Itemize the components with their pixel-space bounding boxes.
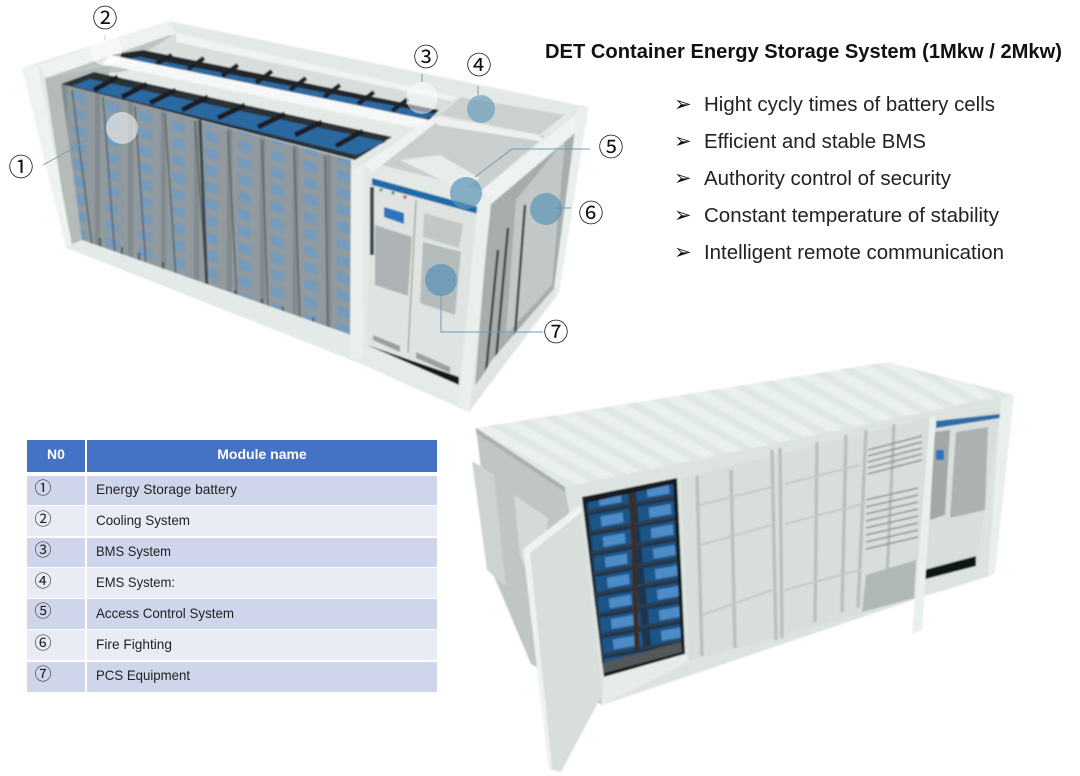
bullet: BMS: ➢ [674,129,692,153]
row 1: Energy Storage battery [96,482,237,497]
bullet: battery cells: ➢ [674,92,692,116]
row 1 [27,474,437,505]
leader lines [43,35,590,332]
ventilation grills [862,436,922,612]
row 5: ⑤ [34,597,52,622]
row 4: ④ [34,567,52,592]
PCS cabinet compartment [350,97,565,385]
bullet: security: Authority control of security [704,168,951,190]
table header: Module name [217,446,307,462]
number labels: ⑤ [598,128,624,164]
centre beam [102,55,429,128]
base plate [67,240,359,363]
table header: N0 [47,446,65,462]
row 1: ① [34,474,52,499]
left frame post [22,65,72,248]
touch screen [384,207,404,224]
bullet: security: ➢ [674,166,692,190]
status lights [379,188,407,199]
row 2 [27,505,437,536]
number labels: ⑦ [543,313,569,349]
bullet: battery cells: Hight cycly times of battery cells [704,94,995,116]
table header [27,440,437,472]
back battery row [110,50,439,120]
front face [565,394,1011,705]
number labels: ② [92,0,118,35]
cabinet front [367,180,478,385]
row 6 [27,629,437,660]
feature list [674,92,1004,264]
cabinet windows [375,225,412,296]
row 6: Fire Fighting [96,637,172,652]
row 4 [27,567,437,598]
row 4: EMS System: [96,575,175,590]
row 3: BMS System [96,544,171,559]
side cooling units [472,461,548,587]
translucent battery racks [61,84,351,335]
bullet: BMS: Efficient and stable BMS [704,131,926,153]
PCS cabinet view [922,411,1000,580]
bullet: communication: ➢ [674,240,692,264]
row 3: ③ [34,536,52,561]
bullet: communication: Intelligent remote communication [704,242,1004,264]
open left door [523,505,602,772]
number labels: ① [8,148,34,184]
module table [27,440,437,692]
lower sill [602,654,689,705]
bullet: temperature: ➢ [674,203,692,227]
right side wall and posts [359,108,588,412]
row 3 [27,536,437,567]
left end wall [476,428,602,705]
row 7: ⑦ [34,660,52,685]
open right door [912,416,936,634]
number labels: ⑥ [578,194,604,230]
number labels [8,0,624,349]
closed container illustration [472,362,1014,772]
row 5: Access Control System [96,606,234,621]
row 6: ⑥ [34,629,52,654]
number labels: ③ [413,38,439,74]
front battery top row [61,72,392,160]
corrugated roof [476,362,1011,487]
row 5 [27,597,437,629]
bullet: temperature: Constant temperature of stability [704,205,999,227]
row 2: Cooling System [96,513,190,528]
front door panels [681,418,930,661]
row 2: ② [34,505,52,530]
row 7 [27,660,437,692]
callout circles [90,34,562,296]
battery bay [582,478,685,677]
row 7: PCS Equipment [96,668,190,683]
cutaway container illustration [22,21,588,412]
number labels: ④ [466,46,492,82]
right corner post [988,395,1014,577]
title: DET Container Energy Storage System (1Mkw / 2Mkw) [545,41,1062,63]
